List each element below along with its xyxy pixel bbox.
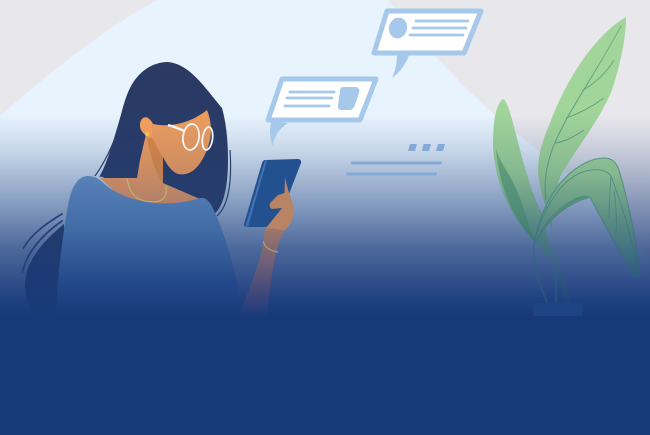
lower back hair (25, 224, 70, 318)
left leaf underside (496, 148, 534, 241)
right leaf (534, 158, 640, 276)
pot (533, 303, 583, 316)
earring (145, 132, 149, 136)
back hair strands (22, 214, 62, 272)
chat bubble: lower (268, 79, 376, 146)
right leaf veins (536, 170, 639, 272)
person (22, 62, 301, 318)
necklace (127, 178, 166, 202)
stems (534, 243, 556, 305)
neck shadow (147, 138, 163, 184)
arm and hand (238, 177, 293, 318)
phone edge (246, 160, 267, 226)
tall leaf veins (545, 26, 621, 200)
glasses (168, 123, 214, 151)
fingers (266, 177, 293, 230)
neck and chest (100, 125, 200, 208)
left hair strands (95, 125, 120, 177)
bracelet (264, 241, 278, 252)
phone (244, 159, 301, 227)
left leaf (493, 99, 554, 264)
tall leaf (538, 17, 626, 305)
main hair (100, 62, 228, 215)
ear (140, 117, 153, 137)
right leaf underside (537, 196, 590, 238)
chat bubble: upper (374, 11, 481, 78)
typing indicator (346, 144, 445, 176)
plant (493, 17, 640, 316)
face (153, 110, 211, 174)
sweater (56, 176, 243, 318)
right hair strand (217, 150, 231, 216)
background: navy fade (0, 115, 650, 435)
